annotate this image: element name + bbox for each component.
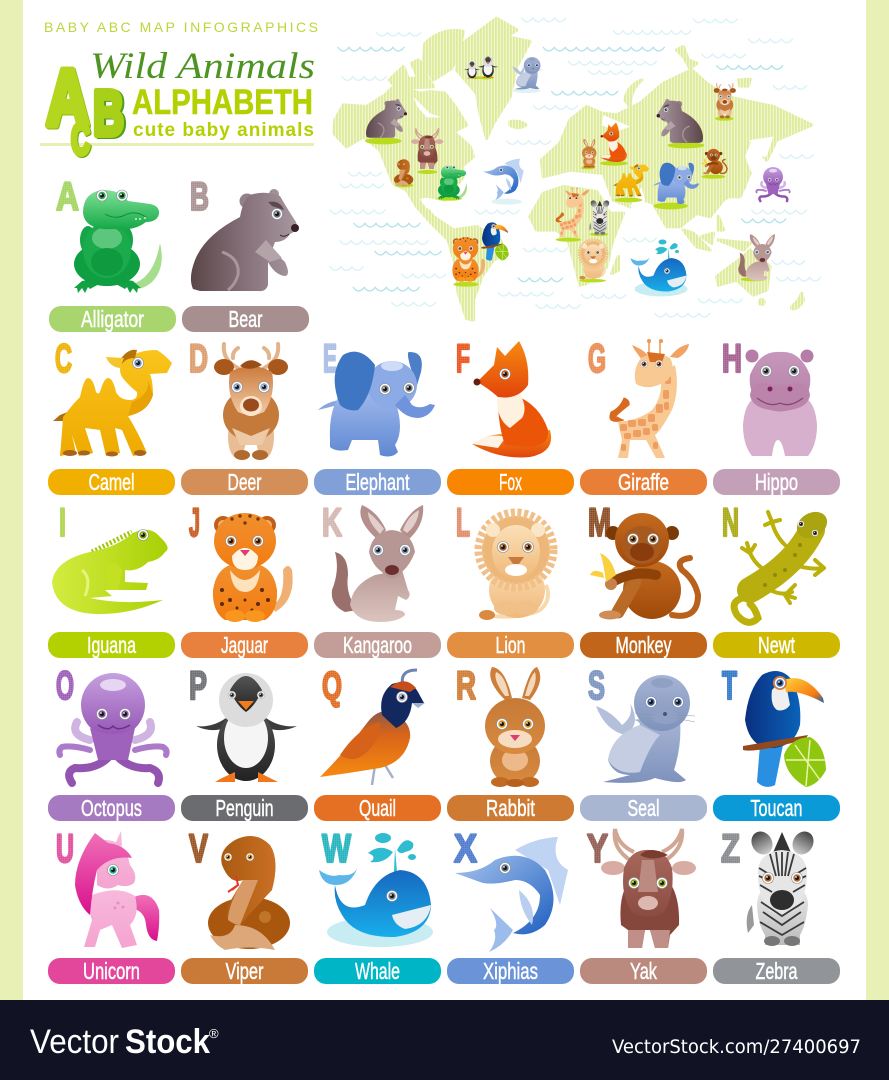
icon: newt — [734, 507, 832, 622]
card: Xiphias — [447, 827, 574, 984]
name label: Jaguar — [221, 632, 268, 658]
name label: Whale — [355, 958, 400, 984]
card: Quail — [314, 664, 441, 821]
map animal markers — [366, 56, 790, 296]
icon: ABC blocks: A — [46, 53, 89, 142]
world map — [330, 18, 821, 320]
icon: yak — [601, 829, 696, 948]
icon: hippo — [743, 350, 817, 456]
card: Yak — [580, 827, 707, 984]
name label: Iguana — [87, 632, 136, 658]
letter L: L — [456, 501, 470, 545]
name label — [447, 795, 574, 821]
icon: seal — [596, 675, 695, 783]
card: Kangaroo — [314, 501, 441, 658]
letter X: X — [454, 827, 477, 871]
card: Jaguar: J — [189, 501, 200, 545]
letter I: I — [59, 501, 66, 545]
letter W: W — [322, 827, 351, 871]
letter Q: Q — [322, 664, 342, 708]
name label: Rabbit — [486, 795, 535, 821]
name label — [580, 632, 707, 658]
letter N: N — [722, 501, 739, 545]
icon: zebra — [747, 828, 818, 946]
icon: giraffe — [610, 339, 689, 458]
letter C: C — [55, 337, 72, 381]
card: Viper — [181, 827, 308, 984]
letter H: H — [722, 337, 742, 381]
name label — [182, 306, 309, 332]
name label: Alligator — [81, 306, 144, 332]
card: Bear — [182, 175, 309, 332]
icon: elephant — [318, 352, 435, 456]
letter G: G — [588, 337, 606, 381]
card: Lion — [447, 501, 574, 658]
name label: Camel — [88, 469, 134, 495]
icon: jaguar — [213, 513, 293, 622]
card: Seal — [580, 664, 707, 821]
eyebrow text: BABY ABC MAP INFOGRAPHICS — [44, 19, 318, 35]
name label: Octopus — [81, 795, 142, 821]
letter A: A — [56, 175, 79, 219]
letter M: M — [588, 501, 611, 545]
name label: Fox — [499, 469, 522, 495]
letter E: E — [323, 337, 337, 381]
icon: ABC blocks: B — [93, 77, 124, 149]
card: Zebra — [713, 827, 840, 984]
card: Monkey — [580, 501, 707, 658]
card: Whale — [314, 827, 441, 984]
name label: Monkey — [616, 632, 672, 658]
name label: Seal — [628, 795, 660, 821]
icon: octopus — [59, 673, 167, 783]
icon: deer — [214, 344, 288, 460]
letter F: F — [456, 337, 470, 381]
name label — [48, 469, 175, 495]
card: Elephant — [314, 337, 441, 495]
name label: Xiphias — [483, 958, 538, 984]
card: Deer — [181, 337, 308, 495]
letter B: B — [190, 175, 209, 219]
title block — [40, 19, 318, 164]
card: Alligator — [49, 175, 176, 332]
icon: viper — [208, 836, 290, 950]
letter Y: Y — [587, 827, 608, 871]
name label: Yak — [630, 958, 657, 984]
name label — [181, 958, 308, 984]
icon: monkey — [590, 513, 698, 620]
name label — [49, 306, 176, 332]
name label — [580, 795, 707, 821]
letter V: V — [189, 827, 208, 871]
icon: whale — [319, 833, 433, 947]
name label — [713, 632, 840, 658]
name label: Elephant — [346, 469, 410, 495]
letter K: K — [322, 501, 342, 545]
name label — [447, 632, 574, 658]
name label: Penguin — [216, 795, 274, 821]
icon: penguin — [196, 673, 297, 782]
icon: alligator — [74, 190, 162, 293]
card: Penguin — [181, 664, 308, 821]
main heading: ALPHABETH — [132, 83, 313, 122]
card: Hippo — [713, 337, 840, 495]
name label: Deer — [228, 469, 262, 495]
icon: camel — [53, 350, 172, 456]
card: Toucan — [713, 664, 840, 821]
letter D: D — [189, 337, 208, 381]
card: Newt — [713, 501, 840, 658]
icon: unicorn — [75, 831, 159, 948]
footer bar — [0, 1000, 889, 1080]
name label: Bear — [228, 306, 263, 332]
name label — [48, 958, 175, 984]
letter T: T — [722, 664, 737, 708]
name label — [580, 469, 707, 495]
letter R: R — [456, 664, 476, 708]
card: Giraffe — [580, 337, 707, 495]
logo text: Vector — [30, 1023, 119, 1061]
footer bar: ® — [209, 1026, 219, 1041]
name label: Kangaroo — [343, 632, 412, 658]
name label — [314, 958, 441, 984]
name label: Giraffe — [618, 469, 669, 495]
letter Z: Z — [721, 827, 740, 871]
icon: fox — [472, 341, 551, 457]
card: Rabbit — [447, 664, 574, 821]
icon: toucan — [743, 671, 826, 787]
name label — [181, 632, 308, 658]
name label — [713, 958, 840, 984]
letter S: S — [588, 664, 605, 708]
script heading: Wild Animals — [90, 46, 315, 87]
icon: rabbit — [485, 667, 545, 787]
icon: ABC blocks — [46, 53, 124, 164]
card: Unicorn — [48, 827, 175, 984]
map land masses and waves — [330, 18, 821, 320]
icon: lion — [479, 513, 553, 620]
letter U: U — [56, 827, 74, 871]
letter O: O — [56, 664, 74, 708]
name label — [48, 632, 175, 658]
icon: quail — [320, 670, 425, 785]
name label — [181, 795, 308, 821]
name label: Hippo — [755, 469, 798, 495]
card: Iguana — [48, 501, 175, 658]
name label — [713, 795, 840, 821]
name label — [447, 958, 574, 984]
name label: Newt — [758, 632, 795, 658]
subheading: cute baby animals — [133, 120, 314, 141]
name label — [580, 958, 707, 984]
letter P: P — [189, 664, 207, 708]
name label — [48, 795, 175, 821]
name label: Zebra — [756, 958, 798, 984]
name label — [181, 469, 308, 495]
footer bar: Stock — [125, 1023, 210, 1061]
name label: Unicorn — [83, 958, 140, 984]
image id text: VectorStock.com/27400697 — [612, 1036, 861, 1058]
name label: Quail — [359, 795, 396, 821]
name label: Lion — [496, 632, 526, 658]
card: Jaguar — [181, 501, 308, 658]
icon: ABC blocks: C — [71, 115, 90, 164]
icon: iguana — [52, 530, 168, 614]
card: Camel — [48, 337, 175, 495]
name label — [314, 795, 441, 821]
name label — [713, 469, 840, 495]
name label: Toucan — [750, 795, 802, 821]
icon: kangaroo — [332, 505, 423, 622]
name label — [447, 469, 574, 495]
name label: Viper — [226, 958, 264, 984]
icon: bear — [191, 189, 299, 291]
card: Fox — [447, 337, 574, 495]
icon: xiphias — [455, 837, 568, 952]
card: Octopus — [48, 664, 175, 821]
